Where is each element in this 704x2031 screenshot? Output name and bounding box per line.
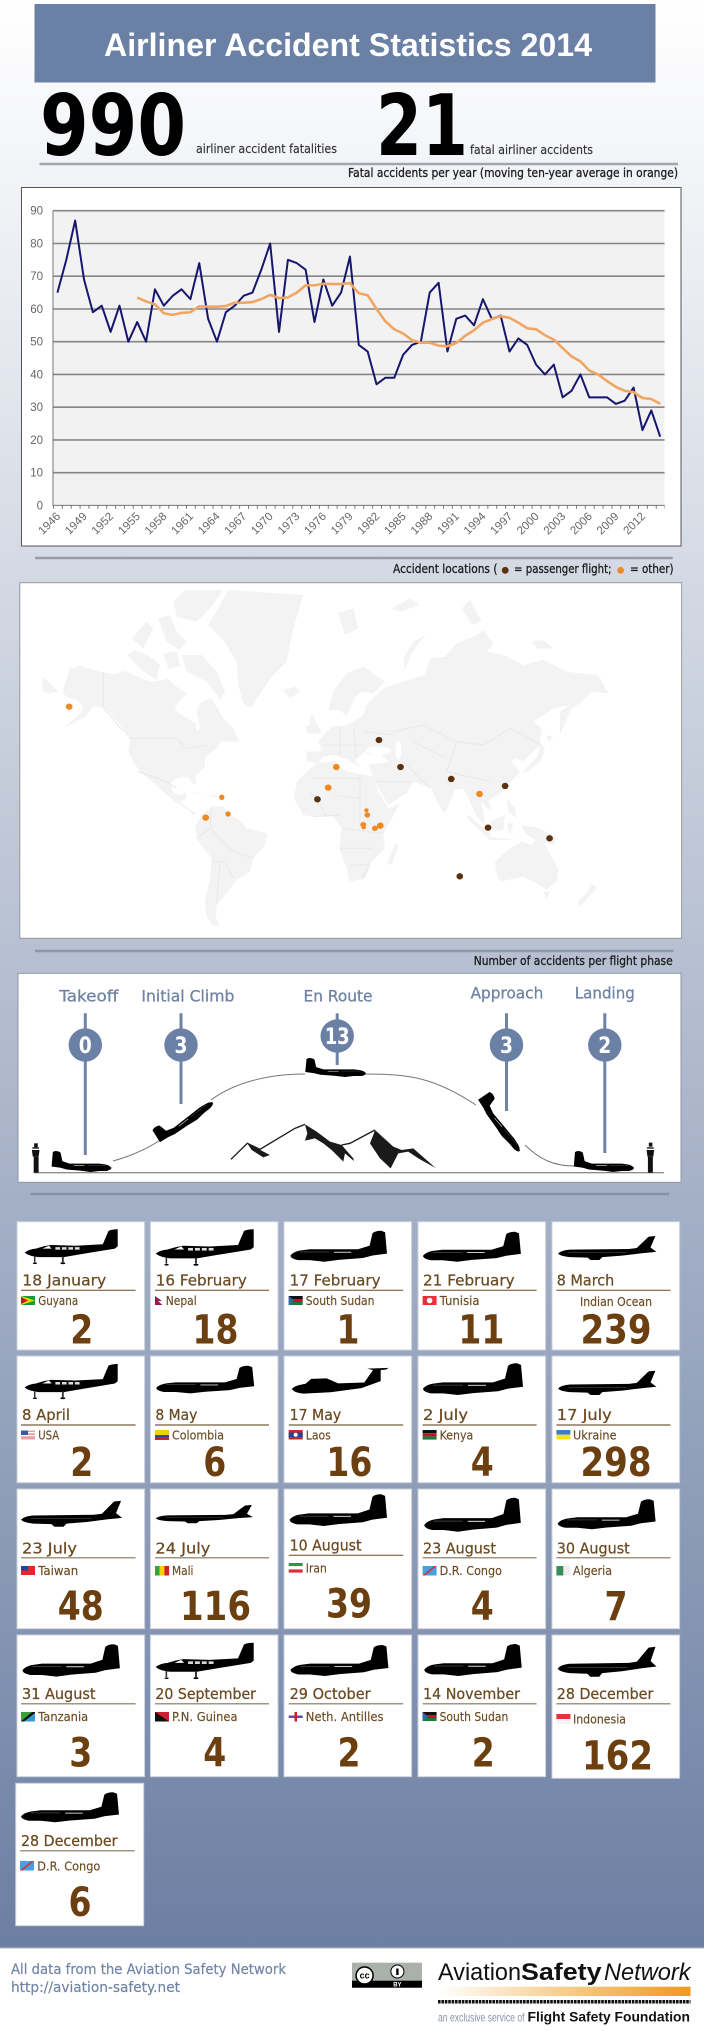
phase: initial climb: 3: [174, 1034, 188, 1059]
fatalities: 4: [203, 1731, 226, 1777]
icon: aircraft: [25, 1229, 118, 1264]
title banner: [34, 4, 656, 82]
fatalities: 48: [58, 1584, 104, 1630]
x axis year labels: 1985: [382, 511, 409, 537]
footer: data source: http://aviation-safety.net: [11, 1980, 180, 1996]
country: [556, 1712, 626, 1727]
card: 17 May, Laos: [284, 1356, 412, 1486]
footer panel: [0, 1948, 704, 2031]
card: 20 September, P.N. Guinea: [150, 1635, 278, 1777]
card: 23 July, Taiwan: [17, 1489, 145, 1630]
panel: world map of accident locations: [20, 583, 682, 938]
logo: Aviation Safety Network: an exclusive service of: [438, 2011, 525, 2025]
heading: map caption with legend: [393, 561, 674, 576]
country: Tanzania: [37, 1709, 88, 1724]
fatalities: 1: [336, 1307, 360, 1353]
country: South Sudan: [440, 1709, 508, 1724]
stat: fatalities: [40, 77, 337, 176]
phase: en route: En Route: [304, 987, 372, 1006]
y axis labels: 20: [30, 435, 43, 447]
x axis year labels: 1997: [489, 511, 515, 537]
title banner: Airliner Accident Statistics 2014: [104, 27, 592, 63]
stat: fatal accidents: [376, 77, 593, 176]
date: 28 December: [21, 1832, 118, 1850]
phase: landing: 2: [598, 1034, 611, 1059]
x axis year labels: 1991: [435, 511, 462, 537]
line chart: fatal accidents per year: [22, 188, 681, 546]
fatalities: 3: [69, 1731, 92, 1777]
x axis year labels: 1946: [37, 511, 63, 537]
date: 30 August: [557, 1539, 630, 1557]
country: Mali: [172, 1563, 194, 1578]
card: 23 August, D.R. Congo: [418, 1489, 546, 1630]
date: 17 February: [290, 1272, 381, 1290]
phase: initial climb: [141, 987, 234, 1104]
date: 10 August: [290, 1537, 362, 1555]
y axis labels: 70: [30, 271, 43, 283]
x axis year labels: 2003: [542, 511, 568, 537]
heading: map caption with legend: = other): [630, 561, 674, 576]
icon: plane landing: [574, 1151, 634, 1172]
phase: landing: Landing: [575, 984, 635, 1003]
icon: aircraft: [22, 1644, 120, 1677]
country: Guyana: [38, 1293, 78, 1308]
x axis year labels: 1958: [143, 511, 170, 537]
y axis labels: 80: [30, 238, 43, 250]
date: 8 March: [557, 1272, 614, 1290]
icon: aircraft: [424, 1644, 522, 1676]
country: [21, 1563, 78, 1578]
y axis labels: 30: [30, 402, 43, 414]
series: ten-year moving average: [137, 283, 660, 404]
icon: aircraft: [290, 1645, 388, 1676]
logo: Aviation Safety Network: [438, 1959, 692, 2025]
icon: aircraft: [156, 1505, 253, 1523]
card: 8 May, Colombia: [150, 1356, 278, 1486]
flight path curve: [113, 1074, 574, 1166]
date: 8 May: [155, 1406, 198, 1424]
footer: data source: [11, 1962, 287, 1996]
logo: Aviation Safety Network: Network: [604, 1959, 692, 1986]
country: Algeria: [573, 1563, 612, 1578]
fatalities: 18: [192, 1307, 238, 1353]
x axis year labels: 1982: [356, 511, 382, 537]
heading: map caption with legend: = passenger flight;: [514, 561, 612, 576]
card: 30 August, Algeria: [552, 1489, 680, 1630]
x axis year labels: 2006: [568, 511, 595, 537]
icon: creative commons badge: BY: [393, 1982, 402, 1988]
fatalities: 2: [70, 1307, 93, 1353]
date: 31 August: [22, 1685, 96, 1703]
icon: aircraft: [156, 1643, 254, 1679]
icon: plane climbing: [151, 1090, 215, 1146]
logo: Aviation Safety Network: Flight Safety Foundation: [528, 2010, 690, 2025]
phase: en route: [304, 987, 372, 1065]
icon: aircraft: [424, 1498, 521, 1532]
map: Eurasia, Africa and Oceania: [294, 598, 608, 907]
phase: takeoff: Takeoff: [58, 987, 119, 1006]
country: USA: [38, 1428, 60, 1443]
x axis year labels: 2012: [622, 511, 648, 537]
stat: fatalities: airliner accident fatalities: [196, 141, 337, 156]
icon: aircraft: [21, 1501, 122, 1527]
country: Ukraine: [573, 1428, 617, 1443]
date: 20 September: [155, 1685, 257, 1703]
date: 21 February: [423, 1272, 515, 1290]
fatalities: 6: [203, 1440, 226, 1486]
icon: aircraft: [156, 1229, 254, 1266]
phase: approach: [471, 984, 543, 1111]
y axis labels: [30, 206, 43, 512]
card: 8 April, USA: [17, 1356, 145, 1486]
card: 28 December, D.R. Congo: [16, 1783, 144, 1926]
country: South Sudan: [306, 1293, 374, 1308]
date: 17 July: [557, 1406, 612, 1424]
date: 28 December: [557, 1685, 654, 1703]
date: 18 January: [22, 1272, 106, 1290]
y axis labels: 90: [30, 206, 43, 218]
icon: aircraft: [21, 1792, 119, 1822]
icon: plane at takeoff: [52, 1151, 111, 1172]
fatalities: 39: [326, 1581, 372, 1627]
icon: plane en route: [305, 1058, 366, 1077]
icon: aircraft: [25, 1364, 118, 1399]
card: 24 July, Mali: [150, 1489, 278, 1630]
icon: aircraft: [292, 1368, 388, 1394]
stat: fatal accidents: 21: [376, 77, 468, 176]
y axis labels: 40: [30, 369, 43, 381]
country: [556, 1563, 612, 1578]
icon: aircraft: [558, 1647, 656, 1677]
series: yearly fatal accidents: [57, 221, 660, 437]
logo: Aviation Safety Network: Aviation: [438, 1959, 521, 1986]
icon: aircraft: [156, 1366, 254, 1393]
date: 2 July: [423, 1406, 468, 1424]
date: 23 July: [22, 1539, 77, 1557]
country: Indonesia: [573, 1712, 626, 1727]
fatalities: 298: [580, 1440, 652, 1486]
fatalities: 4: [471, 1584, 494, 1630]
country: Nepal: [166, 1293, 197, 1308]
phase: takeoff: [58, 987, 119, 1155]
fatalities: 6: [68, 1880, 92, 1926]
icon: aircraft: [290, 1231, 387, 1262]
card: 14 November, South Sudan: [418, 1635, 546, 1777]
country: D.R. Congo: [37, 1859, 100, 1874]
y axis labels: 50: [30, 337, 43, 349]
card: 29 October, Neth. Antilles: [284, 1635, 412, 1777]
map: accident markers, other flights: [66, 703, 483, 831]
y axis labels: 0: [37, 500, 43, 512]
card: 8 March, Indian Ocean: [552, 1222, 680, 1353]
fatalities: 11: [458, 1307, 504, 1353]
date: 14 November: [423, 1685, 521, 1703]
x axis year labels: 1964: [196, 510, 223, 537]
icon: aircraft: [558, 1236, 656, 1260]
icon: creative commons badge: cc: [360, 1970, 370, 1980]
icon: aircraft: [423, 1363, 523, 1395]
card: 18 January, Guyana: [17, 1222, 145, 1353]
x axis year labels: 1961: [170, 511, 196, 537]
icon: right control tower: [647, 1143, 654, 1173]
date: 17 May: [290, 1406, 341, 1424]
country: [155, 1563, 194, 1578]
icon: mountains: [231, 1124, 436, 1168]
fatalities: 2: [338, 1731, 360, 1777]
map: accident markers, passenger flights: [314, 737, 553, 879]
panel: accidents per flight phase: [18, 973, 681, 1182]
country: Tunisia: [439, 1293, 480, 1308]
footer: data source: All data from the Aviation Safety Network: [11, 1962, 287, 1978]
date: 23 August: [423, 1539, 496, 1557]
icon: aircraft: [558, 1371, 656, 1395]
map: Americas and Greenland: [43, 590, 303, 927]
y axis labels: 60: [30, 304, 43, 316]
fatalities: 7: [604, 1584, 628, 1630]
country: Neth. Antilles: [306, 1709, 384, 1724]
card: 16 February, Nepal: [150, 1222, 278, 1353]
country: P.N. Guinea: [172, 1709, 238, 1724]
phase: initial climb: Initial Climb: [141, 987, 234, 1006]
x axis year labels: 1973: [276, 511, 302, 537]
country: [21, 1709, 88, 1724]
x axis year labels: 1976: [302, 511, 329, 537]
card: 2 July, Kenya: [418, 1356, 546, 1486]
country: Taiwan: [37, 1563, 78, 1578]
card: 10 August, Iran: [284, 1489, 412, 1629]
country: Indian Ocean: [580, 1294, 652, 1309]
card: 31 August, Tanzania: [17, 1635, 145, 1777]
icon: aircraft: [423, 1232, 521, 1262]
x axis year labels: 2009: [595, 511, 622, 537]
date: 16 February: [156, 1272, 247, 1290]
fatalities: 2: [472, 1731, 495, 1777]
y axis labels: 10: [30, 468, 43, 480]
card: 17 July, Ukraine: [552, 1356, 680, 1486]
phase: approach: 3: [500, 1034, 513, 1059]
fatalities: 116: [180, 1584, 251, 1630]
icon: left control tower: [32, 1143, 40, 1173]
x axis year labels: 1952: [90, 511, 116, 537]
card: 17 February, South Sudan: [284, 1222, 412, 1353]
x axis year labels: [37, 510, 648, 537]
heading: flight phase caption: Number of accidents per flight phase: [474, 953, 673, 968]
fatalities: 2: [70, 1440, 93, 1486]
x axis year labels: 1955: [116, 511, 143, 537]
x axis year labels: 1988: [409, 511, 435, 537]
heading: map caption with legend: Accident locations (: [393, 561, 498, 576]
country: D.R. Congo: [440, 1563, 502, 1578]
country: Iran: [306, 1560, 327, 1575]
x axis year labels: 2000: [515, 511, 542, 537]
country: Laos: [306, 1428, 331, 1443]
phase: approach: Approach: [471, 984, 543, 1003]
x axis year labels: 1949: [63, 511, 90, 537]
stat: fatal accidents: fatal airliner accidents: [470, 142, 593, 157]
date: 24 July: [155, 1539, 211, 1557]
ground line: [34, 1172, 664, 1174]
fatalities: 162: [582, 1733, 653, 1779]
icon: aircraft: [290, 1494, 387, 1526]
stat: fatalities: 990: [40, 77, 186, 176]
country: Colombia: [172, 1428, 224, 1443]
card: 21 February, Tunisia: [418, 1222, 546, 1353]
country: Kenya: [440, 1428, 473, 1443]
date: 29 October: [290, 1685, 371, 1703]
date: 8 April: [22, 1406, 70, 1424]
icon: aircraft: [558, 1499, 656, 1529]
fatalities: 4: [471, 1440, 494, 1486]
phase: landing: [575, 984, 635, 1153]
phase: takeoff: 0: [79, 1034, 92, 1059]
icon: creative commons badge: [352, 1963, 422, 1988]
fatalities: 16: [326, 1440, 372, 1486]
fatalities: 239: [580, 1307, 652, 1353]
logo: Aviation Safety Network: Safety: [521, 1959, 602, 1986]
icon: plane on approach: [474, 1090, 532, 1154]
card: 28 December, Indonesia: [552, 1635, 680, 1779]
x axis year labels: 1979: [329, 511, 356, 537]
x axis year labels: 1994: [462, 510, 489, 537]
x axis year labels: 1970: [249, 511, 276, 537]
phase: en route: 13: [325, 1025, 350, 1050]
x axis year labels: 1967: [223, 511, 249, 537]
